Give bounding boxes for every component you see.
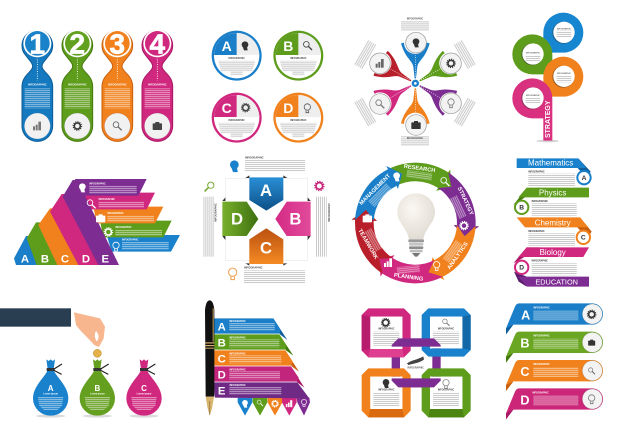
panel: hand and money bags <box>0 308 162 418</box>
ribbon titles: Biology <box>540 248 566 257</box>
light bulb <box>397 193 435 257</box>
circle A <box>212 31 262 81</box>
arrow A: A <box>260 181 272 200</box>
ribbon titles: EDUCATION <box>535 277 578 286</box>
center link front bars <box>392 338 441 387</box>
tag B: B <box>520 337 530 351</box>
tag D: INFOGRAPHIC <box>532 391 549 394</box>
panel: ABCD tag ribbons <box>506 303 603 419</box>
card 3 orange: 3 <box>110 28 125 59</box>
coin <box>93 349 101 357</box>
side text blocks: INFOGRAPHIC <box>327 203 331 222</box>
panel: layered pyramid A-E <box>14 179 180 266</box>
band icons <box>79 183 119 251</box>
frame green: INFOGRAPHIC <box>438 388 454 391</box>
bands: A <box>218 321 226 333</box>
circle D: D <box>283 100 293 116</box>
diagonal strips with letters: C <box>61 254 69 266</box>
card 2 green <box>62 28 93 141</box>
ribbon titles: Chemistry <box>535 218 571 227</box>
stem shadow <box>536 140 559 142</box>
tag B <box>506 332 603 363</box>
side text blocks: INFOGRAPHIC <box>244 266 263 270</box>
corner folds <box>222 175 311 266</box>
horizontal bands: INFOGRAPHIC <box>122 239 139 242</box>
fountain pen <box>205 300 214 416</box>
bands: INFOGRAPHIC <box>229 384 246 387</box>
tag A: A <box>521 308 530 322</box>
diagonal strips with letters: D <box>82 254 90 266</box>
diagonal strips with letters <box>14 180 119 266</box>
bands: INFOGRAPHIC <box>229 320 246 323</box>
circle D <box>273 93 323 143</box>
frame orange: INFOGRAPHIC <box>378 388 395 391</box>
circle C: C <box>222 100 232 116</box>
ring labels: ANALYTICS <box>447 241 470 271</box>
horizontal bands <box>75 179 180 252</box>
center link back <box>392 338 441 387</box>
bag C: C <box>141 384 147 393</box>
circle B: INFOGRAPHIC <box>290 57 307 60</box>
panel: four arrows cross <box>203 156 331 284</box>
center label: INFOGRAPHIC <box>408 367 424 370</box>
letter badges: C <box>581 235 586 242</box>
ribbon titles <box>517 158 589 287</box>
text blocks: INFOGRAPHIC <box>528 230 545 233</box>
horizontal bands: INFOGRAPHIC <box>99 198 115 201</box>
circle B <box>273 31 323 81</box>
bands: INFOGRAPHIC <box>229 352 246 355</box>
bands: E <box>218 385 226 397</box>
diagonal strips with letters: E <box>102 254 110 266</box>
horizontal bands: INFOGRAPHIC <box>115 226 132 229</box>
circle C: INFOGRAPHIC <box>229 119 245 122</box>
side text blocks <box>203 156 331 284</box>
drop green: INFOGRAPHIC <box>526 51 541 54</box>
letter badges <box>514 170 592 275</box>
band folds <box>273 318 304 388</box>
tag A: INFOGRAPHIC <box>533 306 550 309</box>
arrow C: C <box>260 239 272 258</box>
diagonal strips with letters: A <box>21 254 29 266</box>
card 3 orange: INFOGRAPHIC <box>108 83 127 87</box>
drop orange: INFOGRAPHIC <box>557 72 572 75</box>
frame blue: INFOGRAPHIC <box>438 328 454 331</box>
ring text lines <box>364 170 466 274</box>
circle C <box>212 93 262 143</box>
ring labels: STRATEGY <box>456 186 474 216</box>
panel: ABCD circles <box>212 31 323 143</box>
pointer pins <box>238 398 310 416</box>
letter badges: A <box>582 175 587 182</box>
ring icons <box>363 172 468 270</box>
arrow D: D <box>231 210 243 229</box>
bag C <box>126 359 162 418</box>
panel: pen with bands <box>205 300 310 416</box>
card 4 magenta <box>142 28 173 141</box>
tag D: D <box>520 393 530 407</box>
letter badges: D <box>519 265 524 272</box>
drop magenta with stem: STRATEGY <box>545 100 552 138</box>
ring segments <box>345 162 486 284</box>
ring labels: PLANNING <box>393 273 424 283</box>
ribbon titles: Physics <box>539 188 566 197</box>
bag A <box>33 359 68 418</box>
sleeve <box>0 308 71 327</box>
radial text blocks: INFOGRAPHIC <box>407 18 423 21</box>
arrow B: B <box>289 210 301 229</box>
card 3 orange <box>102 28 133 141</box>
horizontal bands: INFOGRAPHIC <box>107 212 124 215</box>
drop magenta with stem: INFOGRAPHIC <box>526 94 541 97</box>
panel: interlocked squares <box>362 308 471 417</box>
bands: INFOGRAPHIC <box>229 368 246 371</box>
ribbon titles: Mathematics <box>528 159 573 168</box>
card 1 blue: 1 <box>30 28 45 59</box>
tag C <box>506 360 603 391</box>
text blocks <box>528 170 577 275</box>
drop magenta with stem <box>512 78 552 141</box>
bands: B <box>218 337 226 349</box>
card 2 green: INFOGRAPHIC <box>68 83 87 87</box>
panel: numbered pill cards <box>22 28 173 141</box>
horizontal bands: INFOGRAPHIC <box>89 182 106 185</box>
letter badges: B <box>519 205 524 212</box>
bands: C <box>218 353 226 365</box>
circle D: INFOGRAPHIC <box>290 119 307 122</box>
text blocks: INFOGRAPHIC <box>532 200 548 203</box>
side text blocks: INFOGRAPHIC <box>214 203 218 222</box>
bag B: Lorem ipsum <box>90 394 105 396</box>
tag C: C <box>520 365 530 379</box>
radial text blocks <box>354 18 476 146</box>
text blocks: INFOGRAPHIC <box>528 170 545 173</box>
panel: arrow ring with light bulb <box>345 162 486 284</box>
card 4 magenta: 4 <box>150 28 166 59</box>
text blocks: INFOGRAPHIC <box>532 260 548 263</box>
bands: INFOGRAPHIC <box>229 336 246 339</box>
bag A: Lorem ipsum <box>43 394 58 396</box>
radial text blocks: INFOGRAPHIC <box>407 137 423 140</box>
tag B: INFOGRAPHIC <box>533 335 550 338</box>
hand <box>74 312 105 347</box>
bag B <box>80 359 115 418</box>
tag A <box>506 303 603 334</box>
panel: six-arm radial diagram <box>354 18 476 146</box>
frame lines <box>226 178 307 261</box>
tag C: INFOGRAPHIC <box>533 363 550 366</box>
circle A: INFOGRAPHIC <box>229 57 245 60</box>
diagonal strips with letters: B <box>41 254 49 266</box>
bag C: Lorem ipsum <box>137 394 151 396</box>
node icons <box>370 32 461 135</box>
frame magenta: INFOGRAPHIC <box>378 328 395 331</box>
side text blocks: INFOGRAPHIC <box>245 156 264 160</box>
circle A: A <box>222 38 232 54</box>
ring labels <box>356 164 474 283</box>
bands: D <box>218 369 226 381</box>
bag B: B <box>94 384 100 393</box>
circle B: B <box>283 38 293 54</box>
card 2 green: 2 <box>70 28 85 59</box>
outer icons <box>205 160 324 280</box>
bands <box>213 318 309 398</box>
ring labels: RESEARCH <box>403 164 436 174</box>
card 4 magenta: INFOGRAPHIC <box>148 83 167 87</box>
arms <box>373 43 458 124</box>
card 1 blue: INFOGRAPHIC <box>28 83 47 87</box>
ring labels: TEAMWORK <box>356 228 379 261</box>
ring labels: MANAGEMENT <box>359 173 392 207</box>
fold connectors <box>513 158 592 287</box>
card 1 blue <box>22 28 53 141</box>
tag D <box>506 388 603 419</box>
panel: education ribbon <box>513 158 592 287</box>
drop blue: INFOGRAPHIC <box>557 27 572 30</box>
panel: strategy tree <box>512 13 583 142</box>
finger gap <box>95 331 99 341</box>
bag A: A <box>48 384 54 393</box>
